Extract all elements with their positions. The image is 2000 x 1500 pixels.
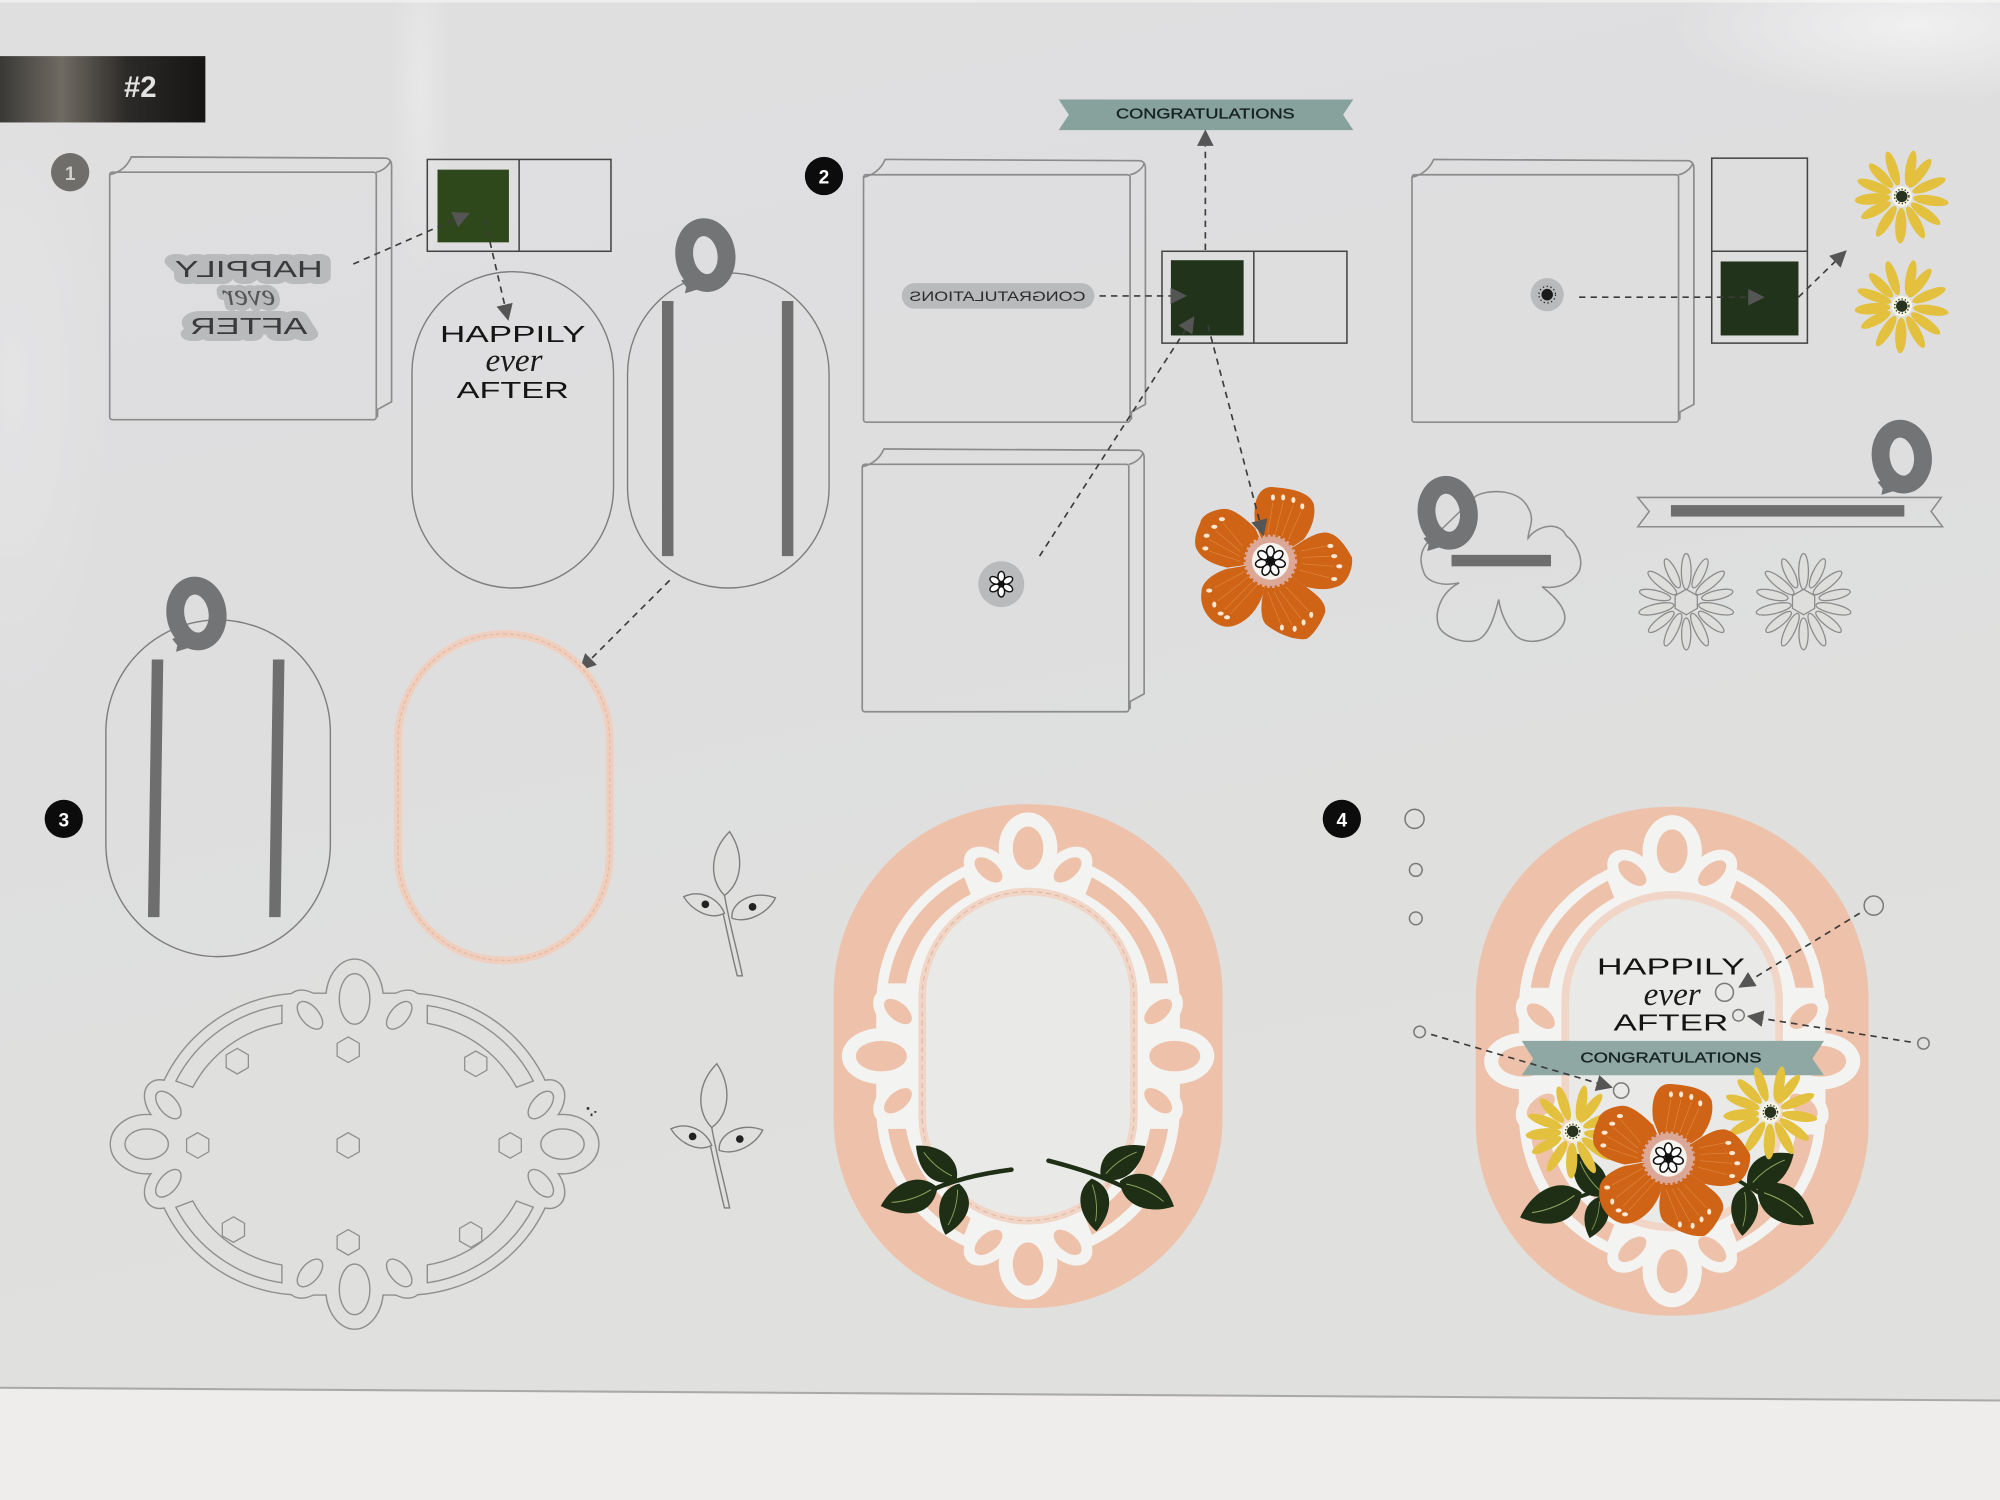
landscape frame die outline with adhesive dots	[111, 960, 598, 1328]
banner	[1522, 1041, 1824, 1075]
finished card	[1476, 807, 1869, 1316]
arrow: tag to stitched panel	[582, 580, 670, 668]
arrow: stamp to ink pad	[1099, 295, 1184, 297]
taped tag with adhesive strips	[628, 224, 829, 588]
step 4 badge: 4	[1337, 811, 1348, 832]
left daisy	[1525, 1085, 1620, 1179]
step 1 stamp block with mirrored sentiment: HAPPILY	[175, 256, 323, 282]
step 4 badge	[1323, 800, 1361, 838]
sentiment: HAPPILY	[1597, 953, 1745, 979]
header tab: #2: #2	[124, 71, 157, 104]
header tab: #2	[0, 56, 205, 122]
ribbon outline with tape	[1638, 426, 1943, 527]
step 3 badge	[45, 800, 83, 838]
daisy die outline right	[1755, 554, 1852, 650]
arrow: stamp to ink pad	[353, 214, 467, 264]
step 2 congratulations stamp block: CONGRATULATIONS	[909, 288, 1085, 304]
stamped tag: HAPPILY	[440, 321, 585, 347]
yellow daisy bottom	[1854, 259, 1949, 353]
sentiment: ever	[1644, 976, 1701, 1013]
step 1 stamp block with mirrored sentiment: AFTER	[190, 313, 307, 339]
foam hexagons on frame	[187, 1037, 521, 1255]
stamped tag: ever	[485, 342, 543, 379]
flower die outline with tape	[1421, 482, 1581, 641]
assembled frame with leaves	[834, 804, 1223, 1308]
step 1 stamp block with mirrored sentiment: ever	[222, 278, 275, 312]
step 2 congratulations stamp block	[864, 159, 1145, 422]
sentiment	[1597, 953, 1745, 1036]
vertical ink pad	[1712, 158, 1807, 343]
right daisy	[1723, 1066, 1818, 1160]
step 1 badge	[51, 153, 89, 191]
right leaf sprig	[1048, 1133, 1181, 1233]
sentiment: AFTER	[1614, 1010, 1728, 1036]
step 2 badge: 2	[819, 168, 829, 189]
orange flower	[1195, 487, 1352, 639]
step 1 ink pad	[427, 159, 611, 251]
step 2 badge	[805, 157, 843, 195]
flower	[1593, 1084, 1750, 1236]
yellow daisy top	[1854, 150, 1949, 244]
arrow: flower stamp to ink pad	[1040, 319, 1193, 556]
step 2 ink pad	[1162, 251, 1347, 343]
arrow: ink pad to banner	[1204, 133, 1206, 250]
specks	[587, 1107, 596, 1116]
stamp block with flower stamp	[862, 449, 1144, 712]
step 1 stamp block with mirrored sentiment: ever	[222, 278, 275, 312]
stitched peach panel	[398, 634, 610, 960]
taped panel	[106, 583, 330, 957]
congratulations banner: CONGRATULATIONS	[1116, 107, 1295, 123]
leaf sprig outline top	[684, 832, 776, 976]
leaves	[1514, 1141, 1824, 1241]
stamped tag: AFTER	[457, 377, 569, 403]
stamped tag	[412, 272, 614, 588]
banner: CONGRATULATIONS	[1580, 1050, 1762, 1066]
step 3 badge: 3	[58, 811, 69, 832]
arrow: ink pad to tag	[485, 219, 508, 318]
step 1 stamp block with mirrored sentiment: AFTER	[190, 313, 307, 339]
arrow: daisy stamp to ink pad	[1579, 296, 1761, 298]
foam dot key	[1405, 809, 1424, 925]
daisy die outline left	[1638, 554, 1735, 650]
placement dots and arrows on finished card	[1414, 896, 1929, 1098]
congratulations banner	[1059, 99, 1353, 130]
step 1 badge: 1	[65, 164, 76, 185]
arrow: ink pad to daisies	[1798, 253, 1844, 297]
step 1 stamp block with mirrored sentiment: HAPPILY	[175, 256, 323, 282]
step 1 stamp block with mirrored sentiment	[110, 157, 392, 420]
leaf sprig outline bottom	[671, 1064, 763, 1208]
arrow: ink pad to orange flower	[1208, 325, 1263, 533]
stamp block with small daisy centre	[1412, 159, 1694, 422]
left leaf sprig	[876, 1135, 1011, 1239]
